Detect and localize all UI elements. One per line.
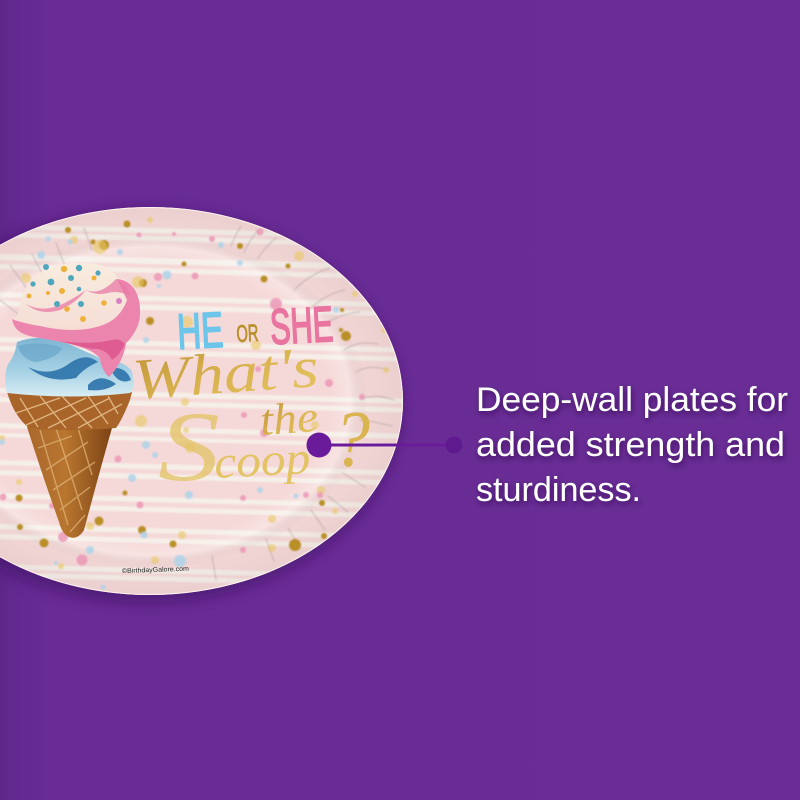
scoop letters: coop	[213, 432, 311, 488]
callout text	[476, 381, 788, 509]
plate well shading	[0, 207, 403, 595]
sprinkles	[26, 264, 122, 322]
confetti speckles	[0, 217, 389, 590]
callout text: Deep-wall plates for	[476, 381, 788, 419]
script heading: What's the Scoop?	[130, 334, 370, 502]
plate shadow	[0, 209, 402, 603]
plate rim edge	[0, 208, 402, 594]
she: SHE	[269, 296, 335, 355]
pink scoop	[12, 263, 140, 377]
copyright: ©BirthdayGalore.com	[122, 565, 190, 575]
waffle collar	[7, 392, 132, 430]
heading: HE OR SHE	[176, 296, 335, 360]
what's: What's	[130, 334, 320, 412]
callout connector	[306, 432, 462, 458]
blue scoop	[5, 338, 134, 396]
callout text: added strength and	[476, 426, 785, 464]
or: OR	[236, 320, 259, 348]
callout dot: plate	[306, 432, 332, 458]
the: the	[258, 392, 320, 445]
question mark: ?	[333, 396, 370, 484]
he: HE	[176, 302, 225, 360]
waffle cone	[27, 427, 112, 538]
scoop initial: S	[158, 391, 220, 502]
fluted rim creases	[0, 226, 394, 580]
plate stripes	[0, 221, 414, 588]
callout dot: text end	[446, 436, 462, 454]
cream dome	[12, 263, 140, 377]
ice cream cone illustration	[5, 263, 140, 538]
callout text: sturdiness.	[476, 471, 641, 509]
pink melt	[12, 279, 140, 377]
paper plate	[0, 207, 414, 595]
